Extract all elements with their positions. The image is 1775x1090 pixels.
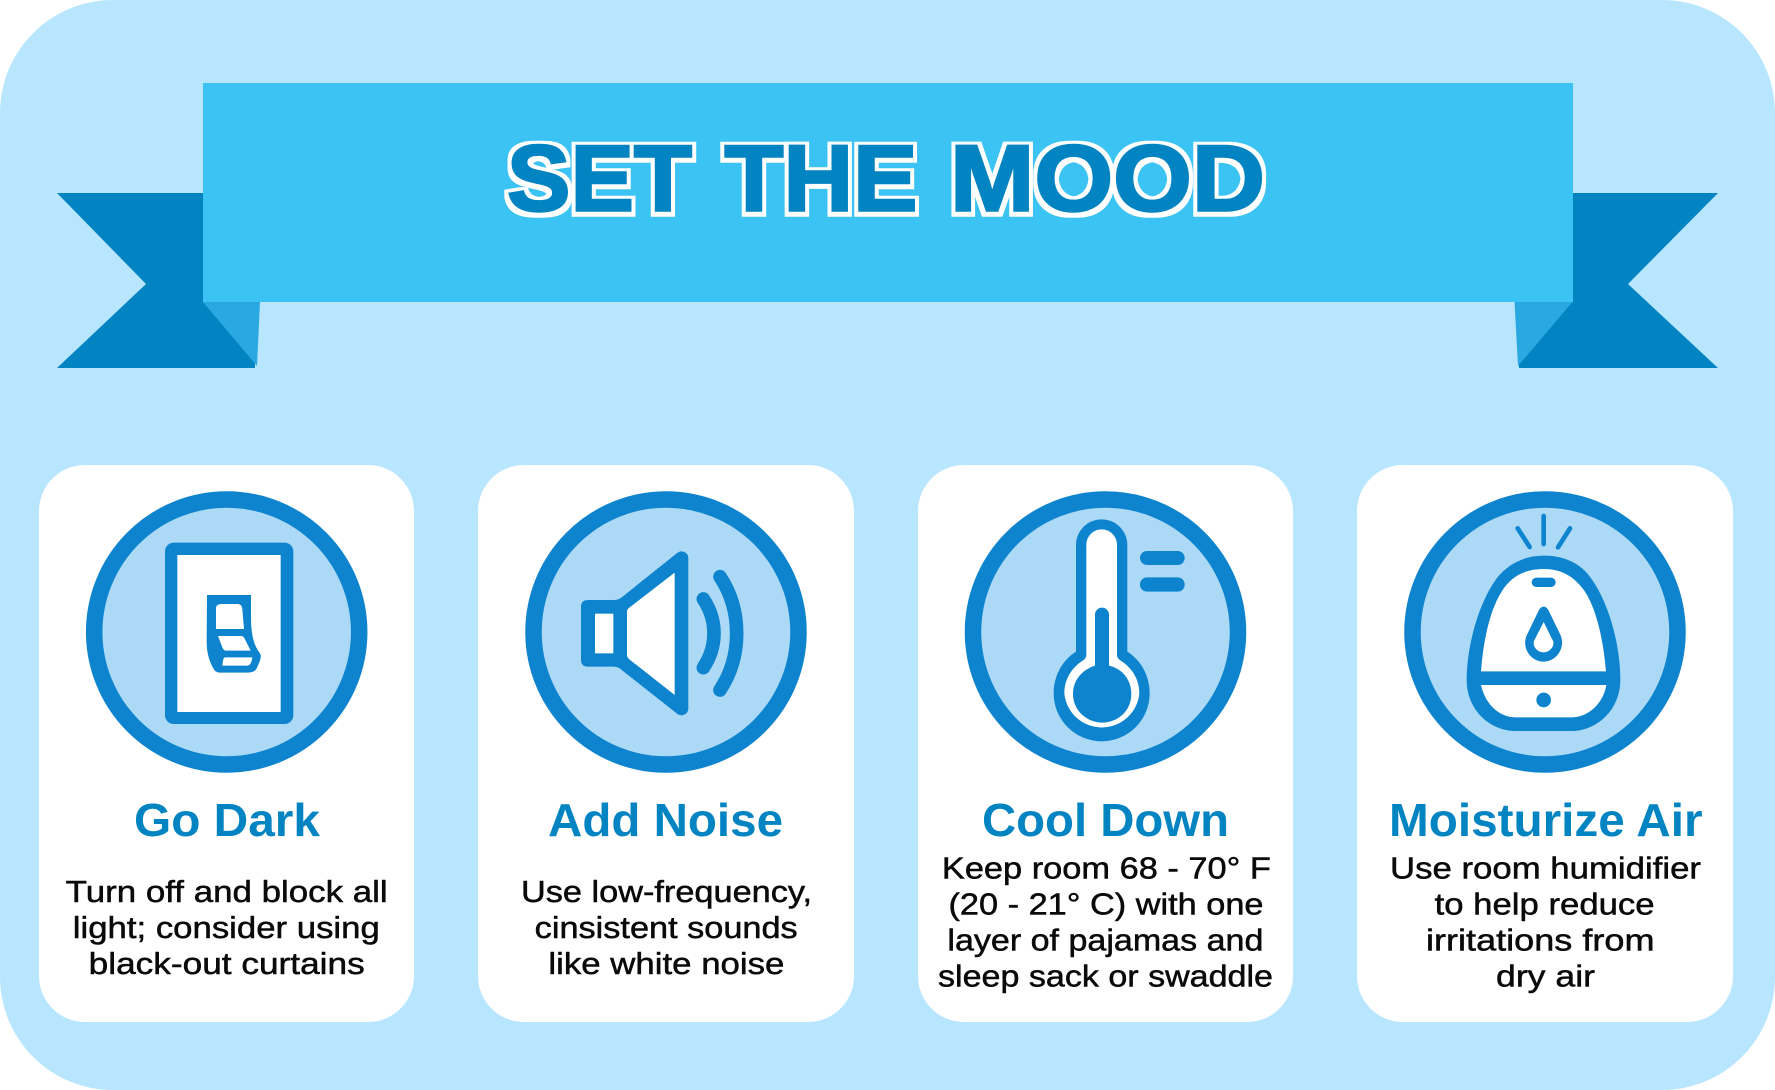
heading: go dark: Go Dark	[134, 794, 320, 846]
text block: go dark: light; consider using	[73, 911, 380, 945]
ribbon banner	[57, 83, 1718, 368]
text block: go dark	[66, 875, 388, 981]
text block: cool down: (20 - 21° C) with one	[948, 888, 1264, 922]
card background	[1357, 465, 1733, 1022]
heading: moisturize air: Moisturize Air	[1389, 794, 1703, 846]
text block: cool down: Keep room 68 - 70° F	[942, 852, 1271, 886]
ribbon right fold	[1514, 302, 1572, 366]
text block: cool down: layer of pajamas and	[947, 924, 1263, 958]
panel: moisturize air	[1357, 465, 1733, 1022]
heading: add noise: Add Noise	[548, 794, 783, 846]
text block: add noise	[521, 875, 812, 981]
text block: moisturize air: to help reduce	[1435, 888, 1655, 922]
text block: cool down	[938, 852, 1273, 994]
icon: thermometer	[973, 500, 1238, 764]
panel: add noise	[478, 465, 854, 1022]
icon: humidifier	[1412, 500, 1678, 764]
panel: cool down	[918, 465, 1293, 1022]
ribbon main band	[203, 83, 1573, 302]
heading: cool down: Cool Down	[982, 794, 1229, 846]
text block: cool down: sleep sack or swaddle	[938, 960, 1273, 994]
text block: moisturize air: dry air	[1496, 960, 1595, 994]
card background	[918, 465, 1293, 1022]
panel: go dark	[39, 465, 414, 1022]
title: MOOD	[950, 126, 1265, 231]
title: THE	[724, 126, 918, 231]
icon: light switch	[94, 500, 359, 764]
ribbon right tail	[1519, 193, 1718, 368]
text block: moisturize air: Use room humidifier	[1390, 852, 1701, 886]
ribbon left fold	[203, 302, 260, 366]
text block: add noise: cinsistent sounds	[535, 911, 798, 945]
title	[507, 126, 1265, 231]
text block: go dark: Turn off and block all	[66, 875, 388, 909]
text block: moisturize air: irritations from	[1426, 924, 1654, 958]
text block: go dark: black-out curtains	[89, 947, 365, 981]
text block: moisturize air	[1390, 852, 1701, 994]
text block: add noise: like white noise	[548, 947, 784, 981]
ribbon left tail	[57, 193, 255, 368]
card background	[478, 465, 854, 1022]
card background	[39, 465, 414, 1022]
text block: add noise: Use low-frequency,	[521, 875, 812, 909]
title: SET	[507, 126, 692, 231]
icon: speaker	[534, 500, 798, 764]
